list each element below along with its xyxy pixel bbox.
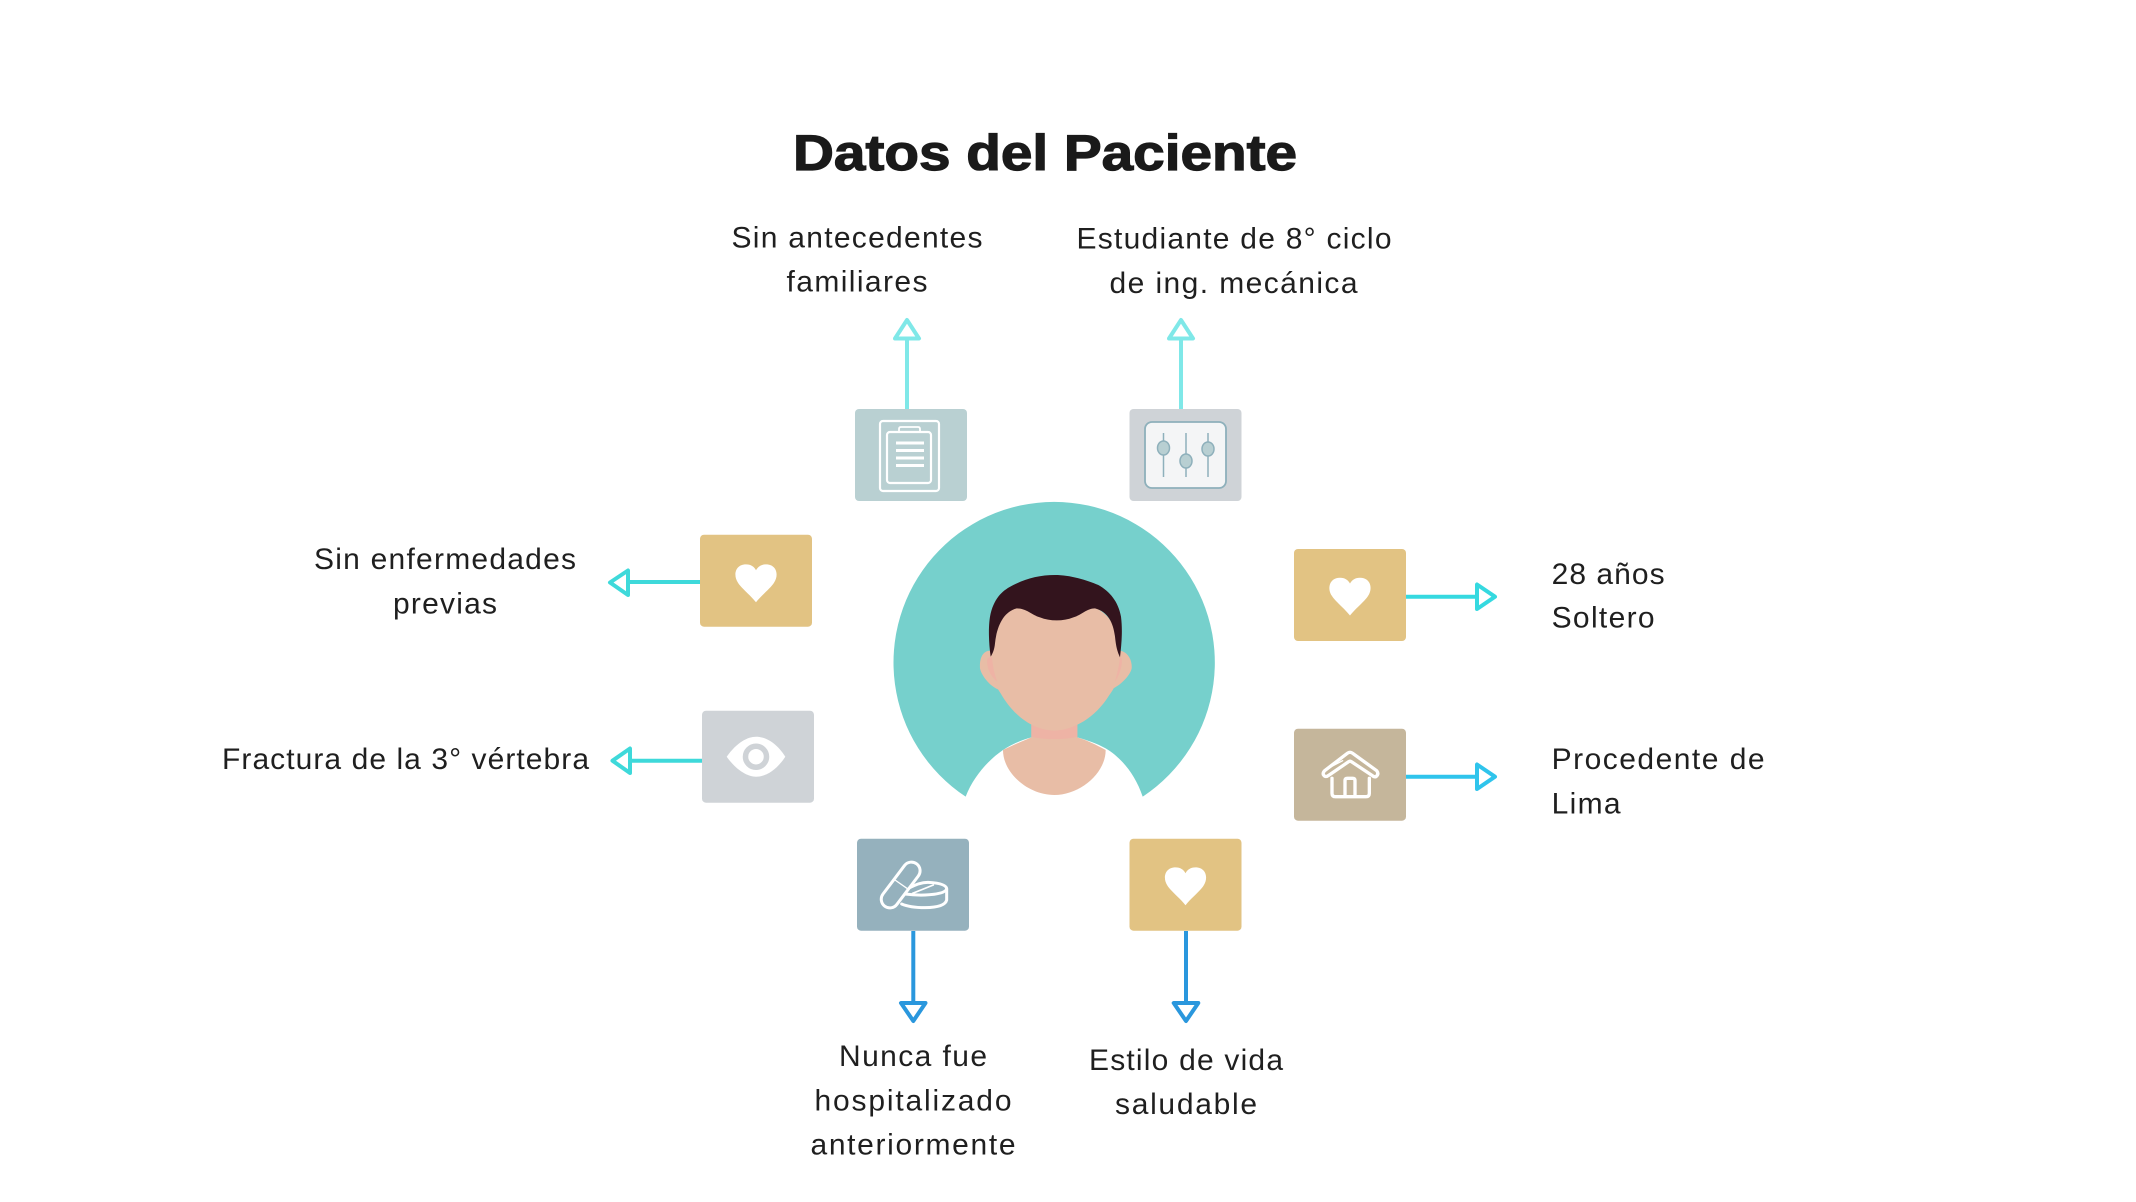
icon: sliders <box>1130 409 1242 501</box>
icon: clipboard <box>855 409 967 501</box>
avatar: patient <box>893 502 1215 797</box>
text: estudiante: de ing. mecánica <box>1110 267 1358 300</box>
text: sin antecedentes familiares: Sin antecedentes <box>732 222 982 254</box>
icon: heart <box>700 535 812 627</box>
panel: nunca fue hospitalizado <box>810 839 1016 1162</box>
text: procedente de lima: Procedente de <box>1552 743 1765 776</box>
arrow: down <box>1174 931 1198 1021</box>
icon: house <box>1294 729 1406 821</box>
text: nunca fue hospitalizado: Nunca fue <box>839 1040 987 1073</box>
text: procedente de lima: Lima <box>1552 788 1621 820</box>
text: estudiante: Estudiante de 8° ciclo <box>1076 222 1392 256</box>
panel: sliders, estudiante <box>1076 222 1392 501</box>
arrow: up <box>1169 320 1193 409</box>
text: fractura: Fractura de la 3° vértebra <box>222 743 589 776</box>
text: estilo de vida saludable: Estilo de vida <box>1089 1044 1283 1077</box>
icon: eye <box>702 711 814 803</box>
arrow: right <box>1406 584 1495 609</box>
arrow: right <box>1406 764 1495 789</box>
panel: sin enfermedades previas <box>314 535 812 627</box>
text: sin enfermedades previas: Sin enfermedades <box>314 543 576 576</box>
panel: 28 años soltero <box>1294 549 1665 641</box>
panel: estilo de vida saludable <box>1089 839 1283 1121</box>
title: Datos del Paciente <box>793 125 1297 181</box>
icon: heart <box>1130 839 1242 931</box>
text: nunca fue hospitalizado: anteriormente <box>810 1128 1016 1162</box>
panel: procedente de lima <box>1294 729 1765 821</box>
text: 28 años soltero: Soltero <box>1552 602 1655 634</box>
panel: clipboard, sin antecedentes familiares <box>732 222 982 501</box>
text: 28 años soltero: 28 años <box>1552 558 1665 591</box>
panel: fractura <box>222 711 814 803</box>
text: nunca fue hospitalizado: hospitalizado <box>814 1084 1012 1118</box>
text: sin enfermedades previas: previas <box>393 588 497 620</box>
text: estilo de vida saludable: saludable <box>1115 1088 1257 1121</box>
arrow: down <box>901 931 926 1021</box>
arrow: up <box>895 320 919 409</box>
arrow: left <box>612 748 702 773</box>
arrow: left <box>610 570 700 595</box>
text: sin antecedentes familiares: familiares <box>786 266 928 298</box>
icon: heart <box>1294 549 1406 641</box>
icon: pills <box>857 839 969 931</box>
